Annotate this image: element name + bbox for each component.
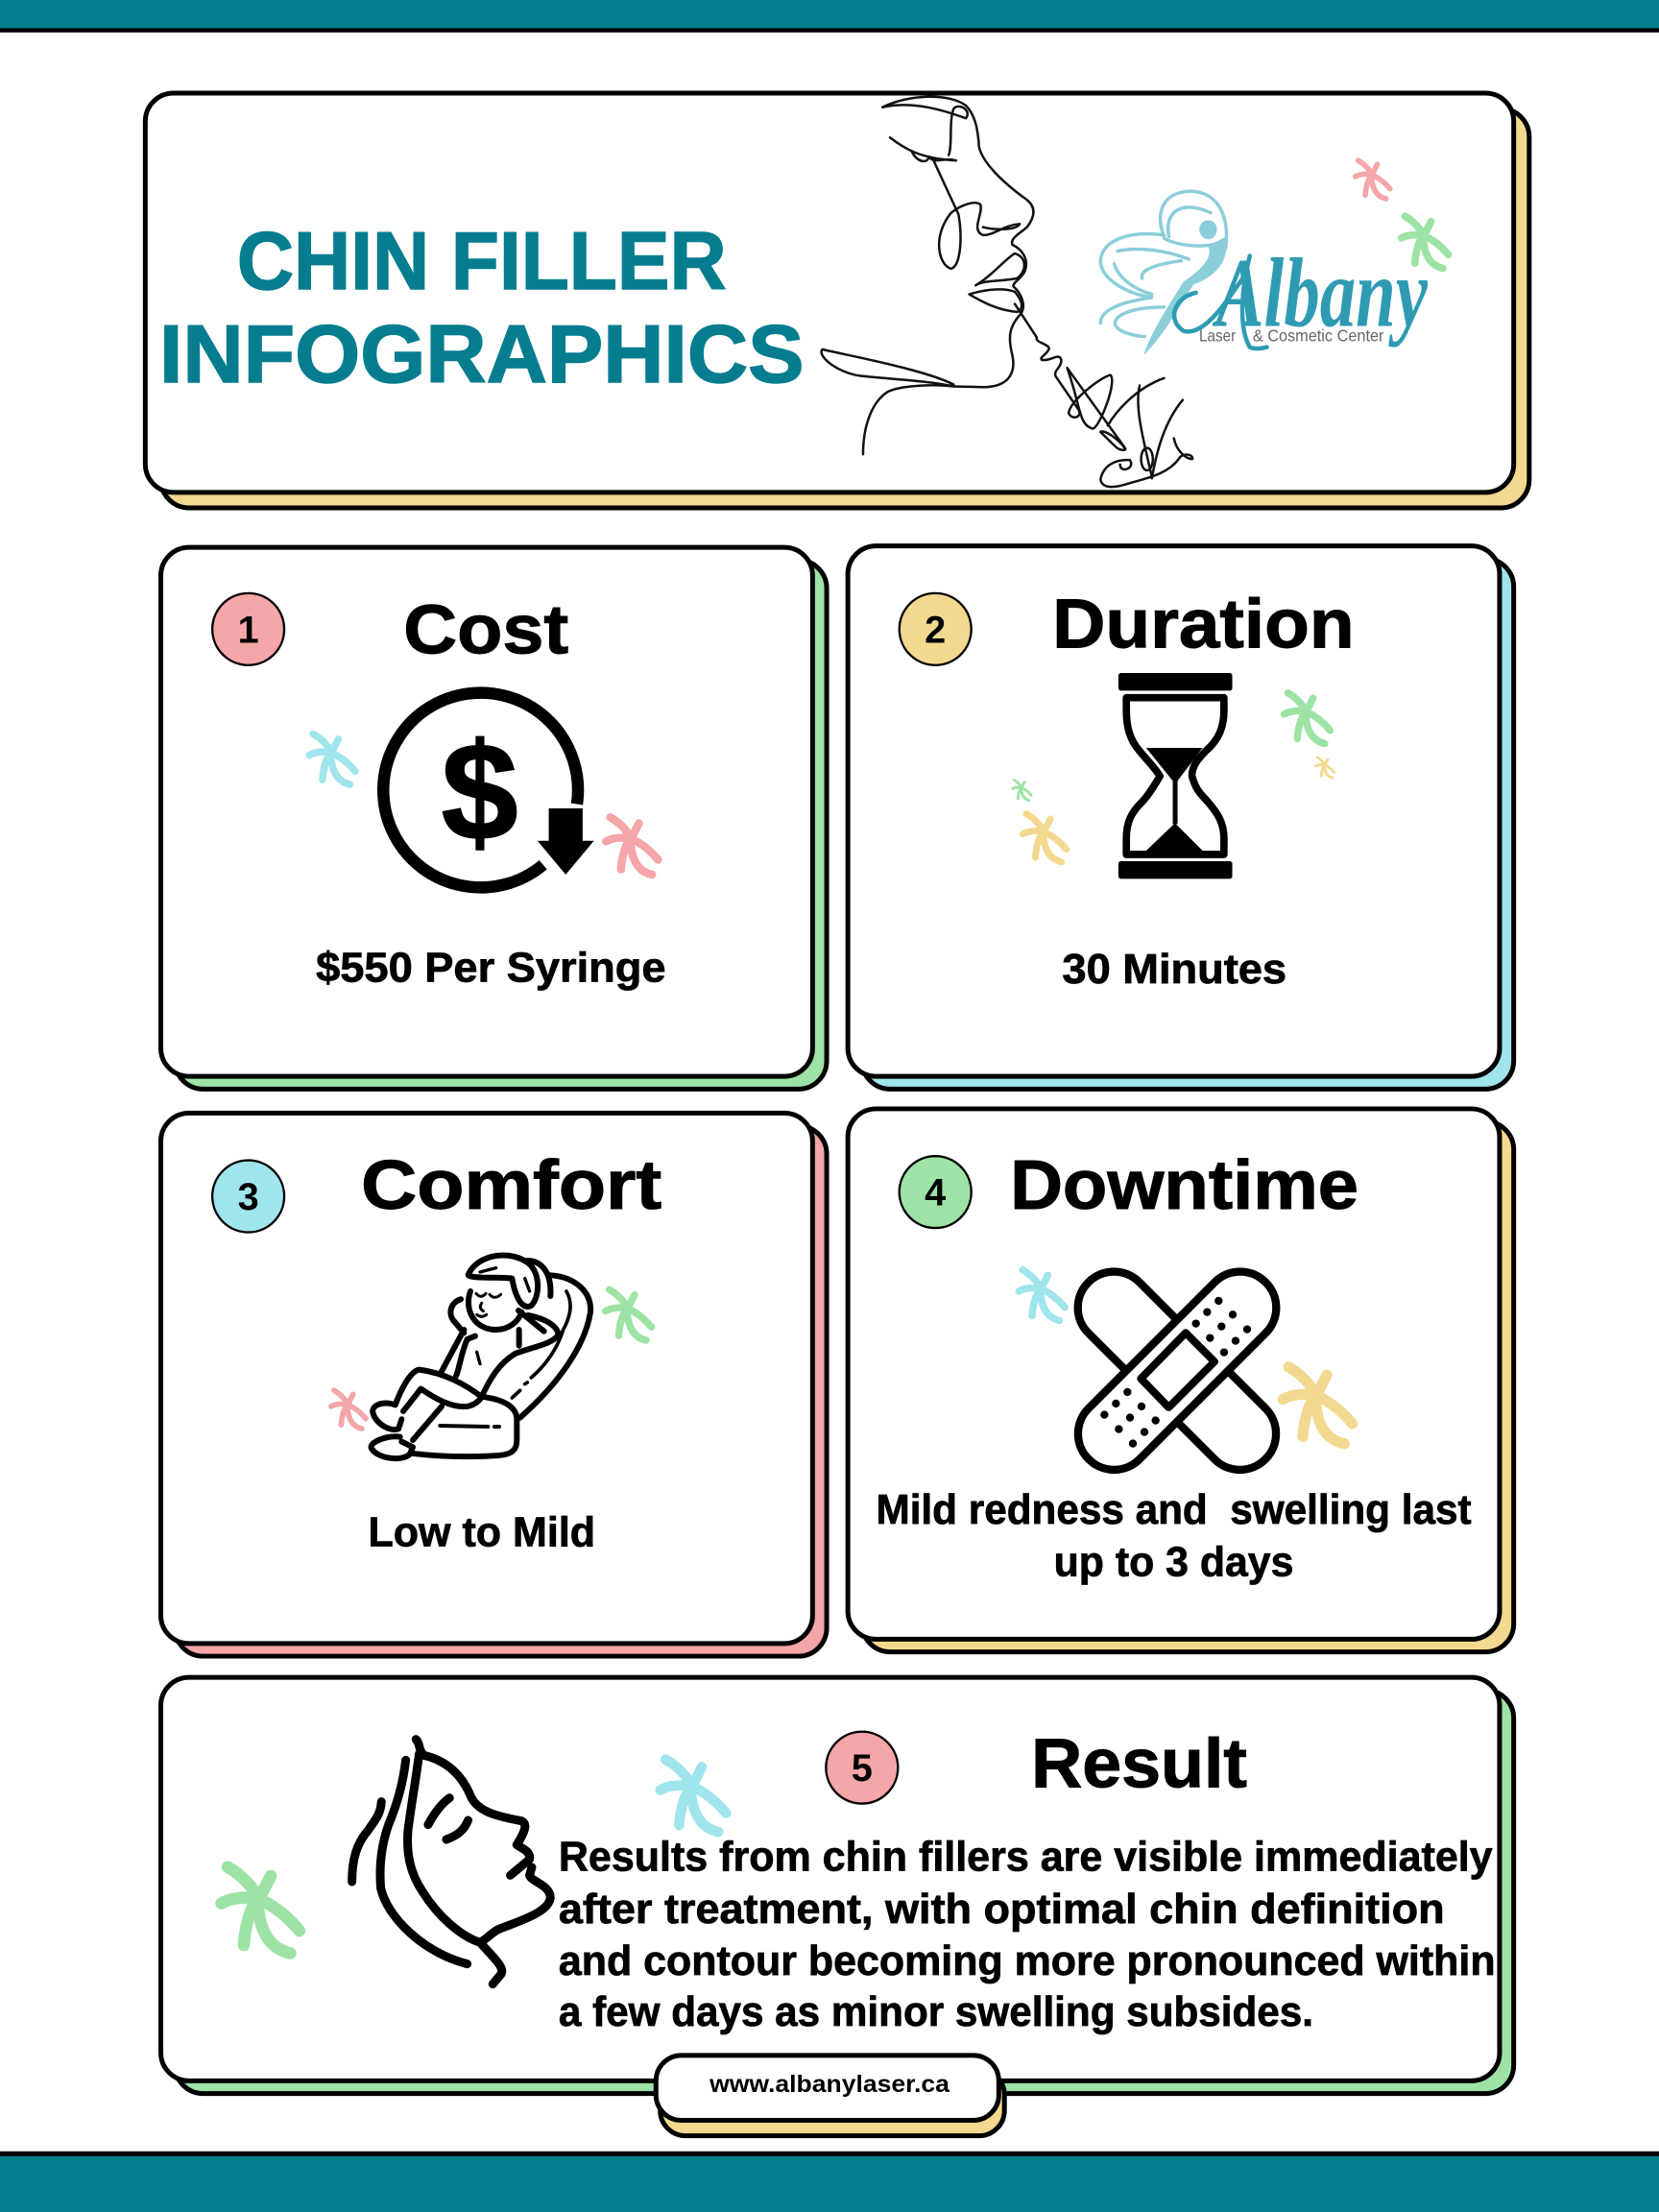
text: result description: a few days as minor swelling subsides.	[559, 1989, 1313, 2035]
logo: Albany Laser & Cosmetic Center	[1100, 191, 1428, 355]
heading: result: Result	[1031, 1726, 1247, 1803]
text: downtime value: up to 3 days	[1054, 1539, 1293, 1585]
top band	[0, 0, 1659, 33]
number badge 3: 3	[238, 1176, 259, 1218]
panel: duration	[848, 546, 1514, 1089]
sprinkle: blue	[309, 733, 355, 784]
website pill: www.albanylaser.ca	[709, 2071, 950, 2098]
heading: duration: Duration	[1052, 586, 1355, 662]
number badge 5: 5	[852, 1747, 873, 1790]
panel: result	[161, 1677, 1514, 2094]
icon: dollar with down arrow: $	[442, 714, 518, 869]
text: result description: Results from chin fillers are visible immediately	[559, 1834, 1493, 1880]
sprinkle: green	[1285, 693, 1330, 743]
title: INFOGRAPHICS	[159, 309, 805, 400]
text: comfort value: Low to Mild	[369, 1509, 595, 1555]
text: cost value: $550 Per Syringe	[316, 946, 666, 992]
sprinkle: pink	[331, 1390, 366, 1429]
heading: comfort: Comfort	[361, 1147, 661, 1224]
text: result description: and contour becoming more pronounced within	[559, 1938, 1496, 1984]
sprinkle: blue	[661, 1760, 726, 1832]
illustration: line-art face with syringe	[822, 97, 1192, 487]
sprinkle: pink	[1356, 160, 1390, 199]
number badge 1: 1	[238, 609, 259, 651]
number badge 5	[826, 1732, 898, 1804]
text: result description: after treatment, with optimal chin definition	[559, 1887, 1445, 1933]
panel: downtime	[848, 1109, 1514, 1652]
logo tagline: Laser	[1199, 326, 1236, 346]
title: CHIN FILLER	[237, 216, 727, 307]
icon: woman face profile	[352, 1740, 550, 1984]
logo wordmark: Albany	[1212, 238, 1428, 348]
sprinkle: small green	[1013, 780, 1031, 801]
logo butterfly	[1100, 191, 1227, 355]
icon: dollar with down arrow	[383, 693, 594, 887]
icon: crossed bandages	[1063, 1257, 1291, 1484]
panel: comfort	[161, 1113, 827, 1656]
icon: person relaxing in chair	[372, 1256, 590, 1458]
text: downtime value	[876, 1487, 1472, 1585]
text: duration value: 30 Minutes	[1062, 947, 1286, 993]
number badge 4	[900, 1156, 972, 1228]
bottom band	[0, 2152, 1659, 2212]
logo tagline: & Cosmetic Center	[1253, 326, 1384, 346]
icon: hourglass	[1118, 673, 1233, 878]
text: result description	[559, 1834, 1496, 2035]
logo tagline	[1199, 326, 1384, 346]
panel: header	[145, 93, 1529, 508]
number badge 1	[212, 593, 284, 665]
sprinkle: pink	[606, 817, 658, 875]
logo wordmark	[1174, 238, 1428, 349]
number badge 4: 4	[925, 1172, 946, 1214]
sprinkle: yellow	[1022, 814, 1067, 862]
sprinkle: small yellow	[1316, 757, 1334, 778]
number badge 3	[212, 1161, 284, 1233]
sprinkle: green	[1401, 216, 1449, 268]
sprinkle: blue	[1019, 1270, 1065, 1320]
number badge 2	[900, 593, 972, 665]
text: downtime value: Mild redness and swelling last	[876, 1487, 1472, 1533]
heading: downtime: Downtime	[1010, 1147, 1358, 1224]
website pill	[656, 2056, 1004, 2136]
sprinkle: green	[222, 1867, 300, 1953]
sprinkle: yellow	[1283, 1367, 1353, 1444]
title	[159, 216, 805, 400]
heading: cost: Cost	[403, 591, 568, 668]
number badge 2: 2	[925, 609, 946, 651]
panel: cost	[161, 547, 827, 1089]
sprinkle: green	[606, 1289, 652, 1340]
